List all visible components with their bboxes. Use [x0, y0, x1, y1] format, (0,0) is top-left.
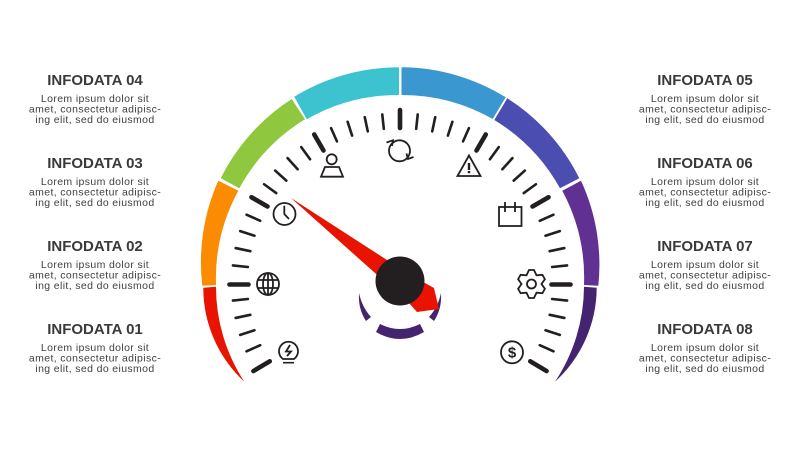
text block: infodata 06: [639, 155, 771, 209]
text block: infodata 08: Lorem ipsum dolor sit: [651, 342, 759, 354]
icon: calendar: [499, 202, 522, 226]
text block: infodata 08: amet, consectetur adipisc-: [639, 352, 771, 364]
gauge band: blue segment: [402, 67, 506, 119]
icon: clock: [274, 203, 296, 225]
text block: infodata 01: Lorem ipsum dolor sit: [41, 342, 149, 354]
gauge band: red segment: [203, 287, 244, 382]
needle: [291, 198, 439, 312]
icon: person: [321, 154, 343, 177]
gauge band: dark purple segment: [555, 287, 597, 382]
text block: infodata 07: [639, 238, 771, 292]
text block: infodata 01: amet, consectetur adipisc-: [29, 352, 161, 364]
text block: infodata 03: amet, consectetur adipisc-: [29, 186, 161, 198]
text block: infodata 03: [29, 155, 161, 209]
text block: infodata 01: ing elit, sed do eiusmod: [35, 363, 155, 375]
text block: infodata 03: ing elit, sed do eiusmod: [35, 197, 155, 209]
hub ring arcs: [359, 293, 441, 339]
text block: infodata 08: [639, 321, 771, 375]
text block: infodata 02: INFODATA 02: [47, 238, 143, 255]
text block: infodata 05: amet, consectetur adipisc-: [639, 104, 771, 116]
gauge band: indigo segment: [494, 98, 579, 188]
icon: refresh: [386, 140, 414, 161]
text block: infodata 05: Lorem ipsum dolor sit: [651, 93, 759, 105]
needle hub: [376, 256, 424, 306]
text block: infodata 04: amet, consectetur adipisc-: [29, 104, 161, 116]
text block: infodata 01: INFODATA 01: [47, 321, 143, 338]
text block: infodata 01: [29, 321, 161, 375]
text block: infodata 04: [29, 72, 161, 126]
text block: infodata 06: ing elit, sed do eiusmod: [645, 197, 765, 209]
text block: infodata 07: INFODATA 07: [657, 238, 753, 255]
text block: infodata 04: Lorem ipsum dolor sit: [41, 93, 149, 105]
text block: infodata 05: ing elit, sed do eiusmod: [645, 114, 765, 126]
text block: infodata 08: ing elit, sed do eiusmod: [645, 363, 765, 375]
icon: light bulb: [279, 342, 298, 363]
text block: infodata 07: Lorem ipsum dolor sit: [651, 259, 759, 271]
gauge band: green segment: [221, 99, 305, 188]
text block: infodata 03: Lorem ipsum dolor sit: [41, 176, 149, 188]
text block: infodata 02: ing elit, sed do eiusmod: [35, 280, 155, 292]
text block: infodata 02: Lorem ipsum dolor sit: [41, 259, 149, 271]
text block: infodata 07: amet, consectetur adipisc-: [639, 270, 771, 282]
text block: infodata 06: INFODATA 06: [657, 155, 753, 172]
text block: infodata 02: [29, 238, 161, 292]
icon: warning triangle: [458, 156, 480, 176]
text block: infodata 07: ing elit, sed do eiusmod: [645, 280, 765, 292]
text block: infodata 03: INFODATA 03: [47, 155, 143, 172]
tick marks: [230, 110, 570, 371]
gauge band: teal segment: [294, 67, 399, 119]
text block: infodata 06: Lorem ipsum dolor sit: [651, 176, 759, 188]
text block: infodata 06: amet, consectetur adipisc-: [639, 186, 771, 198]
text block: infodata 04: ing elit, sed do eiusmod: [35, 114, 155, 126]
icon: gear: [518, 270, 545, 298]
gauge band: purple segment: [562, 181, 599, 286]
text block: infodata 05: INFODATA 05: [657, 72, 753, 89]
gauge band: orange segment: [201, 181, 238, 286]
text block: infodata 02: amet, consectetur adipisc-: [29, 270, 161, 282]
text block: infodata 05: [639, 72, 771, 126]
icon: globe: [257, 273, 279, 295]
icon: dollar: $: [508, 344, 517, 362]
text block: infodata 08: INFODATA 08: [657, 321, 753, 338]
text block: infodata 04: INFODATA 04: [47, 72, 143, 89]
icon: dollar: [501, 341, 523, 363]
